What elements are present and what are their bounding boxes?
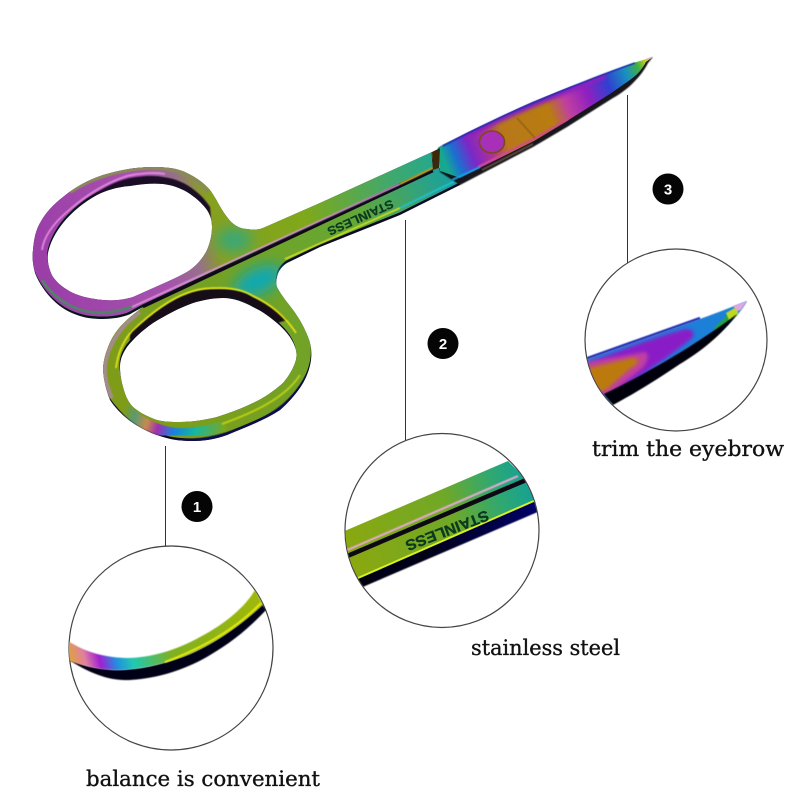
leader line 2 bbox=[404, 220, 406, 440]
upper ring lower green sheen bbox=[42, 280, 134, 313]
badge 2: 2 bbox=[439, 336, 447, 353]
tip orange zone bbox=[580, 358, 638, 392]
arm dark edge bbox=[353, 490, 537, 588]
arm pink highlight bbox=[345, 476, 518, 551]
arm yellow edge bbox=[285, 208, 400, 259]
label: stainless steel: stainless steel bbox=[471, 636, 620, 660]
lower handle rainbow patch bbox=[122, 404, 226, 434]
blade purple top band bbox=[462, 74, 605, 136]
detail circle 2: stainless arm bbox=[340, 434, 540, 628]
blade magenta lower edge bbox=[478, 119, 568, 167]
handle colour band bbox=[66, 590, 263, 670]
blade dark underside bbox=[438, 57, 653, 185]
stainless engraving: STAINLESS bbox=[325, 197, 396, 238]
divider black groove bbox=[143, 171, 433, 307]
lower handle mauve rim bbox=[105, 312, 140, 398]
arm cyan edge bbox=[400, 179, 459, 208]
lower handle colour bbox=[102, 158, 466, 441]
blade cyan lower edge bbox=[452, 167, 480, 180]
upper hole top dark band bbox=[80, 176, 212, 227]
dark silhouette of lower handle bbox=[103, 160, 466, 441]
blade blue top edge bbox=[443, 63, 635, 146]
blade ridge line bbox=[517, 118, 535, 138]
arm upper band bbox=[340, 461, 525, 556]
upper ring olive rim bbox=[70, 168, 208, 192]
pivot screw bbox=[480, 131, 504, 153]
lower neck teal glow bbox=[229, 258, 287, 304]
divider yellow highlight near notch bbox=[400, 168, 433, 184]
badge 3: 3 bbox=[664, 182, 672, 198]
detail circle 3: tip bbox=[580, 249, 767, 431]
upper neck green glow bbox=[216, 228, 252, 252]
badge 2 bbox=[428, 328, 458, 359]
lower right yellow rim bbox=[222, 375, 300, 424]
lower handle yellow highlight bbox=[116, 288, 296, 368]
arm black groove bbox=[345, 480, 526, 557]
divider pink highlight bbox=[132, 184, 400, 307]
badge 1 bbox=[182, 491, 212, 522]
label: balance is convenient: balance is convenient bbox=[86, 767, 321, 791]
badge 1: 1 bbox=[193, 499, 201, 516]
stainless engraving enlarged: STAINLESS bbox=[403, 506, 491, 554]
handle dark underside bbox=[66, 604, 266, 680]
handle yellow highlight bbox=[165, 603, 261, 662]
blade notch bbox=[432, 148, 440, 170]
upper ring pink highlight bbox=[42, 173, 165, 250]
tip blue body bbox=[580, 301, 747, 402]
lower blade brown sheen bbox=[482, 144, 533, 170]
detail circle 1: handle bbox=[66, 546, 273, 750]
upper handle colour bbox=[32, 150, 432, 316]
scissors illustration bbox=[32, 57, 653, 441]
dark silhouette of upper handle bbox=[33, 152, 433, 319]
lower right navy edge bbox=[176, 376, 308, 441]
badge 3 bbox=[652, 174, 684, 204]
tip yellow-green bbox=[726, 306, 738, 322]
lower hole top dark band bbox=[130, 289, 287, 342]
tip top dark band bbox=[582, 318, 700, 360]
arm yellow highlight bbox=[358, 500, 536, 578]
tip black underside bbox=[604, 314, 737, 405]
label: trim the eyebrow: trim the eyebrow bbox=[592, 437, 784, 461]
tip magenta rim bbox=[580, 352, 648, 396]
leader line 3 bbox=[626, 95, 628, 265]
tip green edge bbox=[712, 314, 737, 340]
tip purple zone bbox=[580, 329, 694, 396]
leader line 1 bbox=[164, 446, 166, 546]
tip pink point bbox=[733, 301, 747, 311]
arm lower band bbox=[345, 481, 536, 578]
upper blade colour bbox=[438, 57, 653, 178]
